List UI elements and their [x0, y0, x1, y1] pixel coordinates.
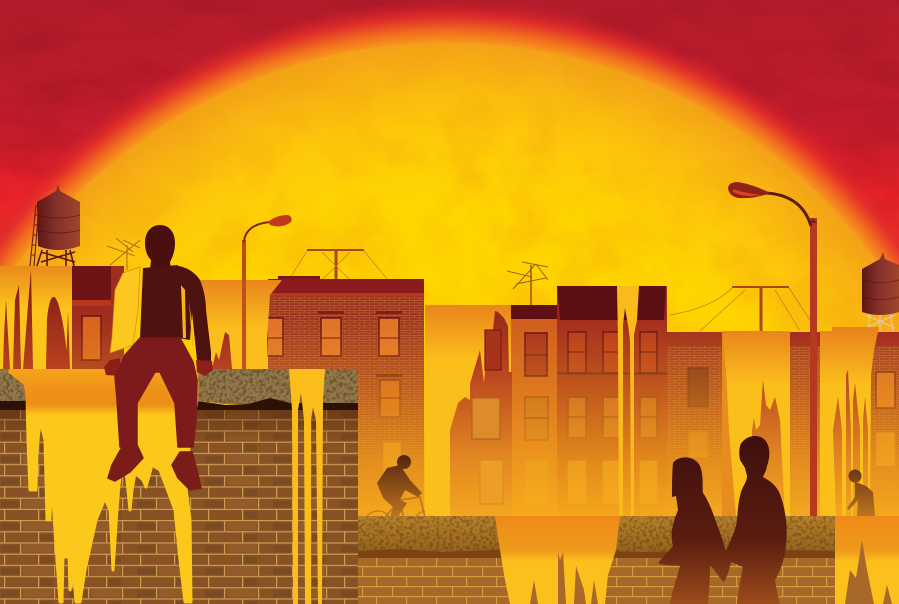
- right street lamp: [728, 182, 817, 517]
- melting drip: yellow band behind man: [198, 280, 282, 369]
- right brick wall: [358, 516, 899, 604]
- melting drip: wall streams: [289, 369, 325, 604]
- sitting man: [104, 225, 213, 490]
- antenna center: [507, 262, 548, 306]
- right arm: [178, 266, 211, 362]
- building: right brick: [788, 332, 899, 517]
- melting drip: far left top band: [0, 266, 72, 369]
- utility pole left: [290, 250, 388, 280]
- melting drip: townhouse stream: [617, 286, 639, 517]
- woman: [658, 457, 727, 604]
- giant sun: [16, 42, 899, 500]
- left street lamp: [242, 215, 292, 369]
- left shoe: [108, 445, 143, 481]
- building: brick center left: [267, 276, 424, 517]
- old man walking: [847, 470, 875, 516]
- melting drip: right band one: [722, 331, 790, 517]
- hands: [104, 358, 213, 376]
- torso: [140, 265, 178, 338]
- wall shadow: [0, 405, 358, 604]
- melting drip: main left wall: [10, 370, 197, 602]
- melting drip: right wall edge: [835, 516, 899, 604]
- melting drip: right wall center: [495, 516, 620, 604]
- melting drip: right band two: [820, 327, 879, 517]
- building: narrow orange house: [510, 305, 557, 517]
- rowhouse buildings: [0, 266, 899, 517]
- antenna left: [107, 238, 140, 270]
- head and neck: [145, 225, 175, 270]
- building: weathered brick: [667, 332, 724, 517]
- concrete cap: [358, 516, 899, 558]
- melted jacket: [110, 267, 140, 353]
- wall bricks: [0, 405, 358, 604]
- building: far left: [0, 266, 124, 369]
- concrete cap: [0, 369, 358, 410]
- utility pole right: [670, 286, 810, 332]
- right water tower: [862, 252, 899, 331]
- building: mansard townhouse: [557, 286, 667, 517]
- trousers: [115, 338, 197, 447]
- heat fade over buildings: [0, 320, 899, 517]
- left brick wall: [0, 369, 358, 604]
- man: [720, 436, 787, 604]
- left water tower: [30, 184, 80, 266]
- couple holding hands: [658, 436, 787, 604]
- melting drip: center band: [425, 305, 512, 517]
- cyclist: [364, 455, 441, 539]
- red sky: [0, 0, 899, 300]
- right shoe: [172, 452, 201, 490]
